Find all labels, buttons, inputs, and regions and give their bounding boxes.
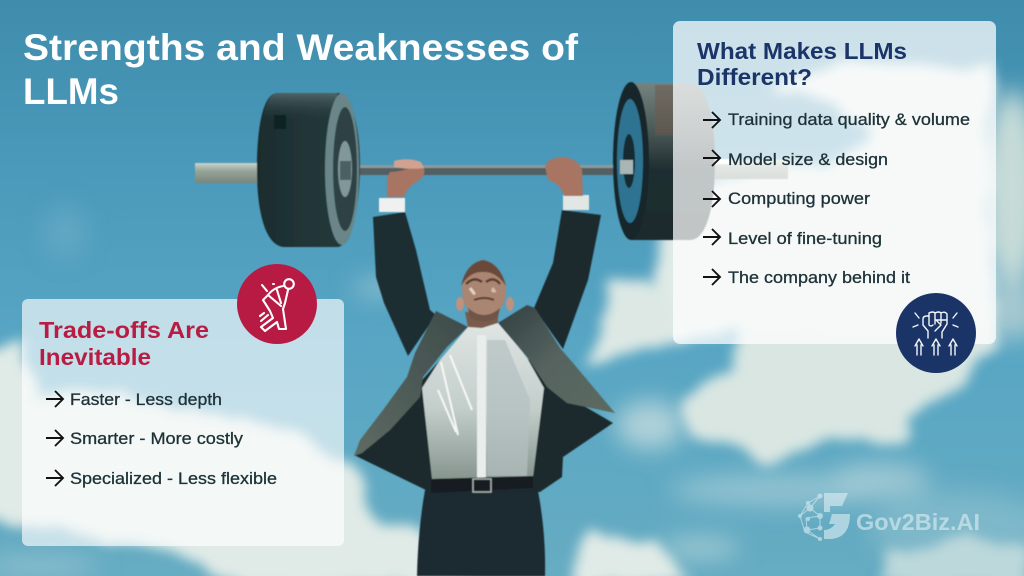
man: right sleeve xyxy=(534,210,601,349)
man: jacket inner lining xyxy=(354,360,613,492)
heading: Trade-offs Are Inevitable xyxy=(39,317,209,370)
heading: What Makes LLMs Different? xyxy=(697,38,907,90)
logo mark xyxy=(798,493,850,541)
list: LLM differentiators: Computing power xyxy=(728,189,870,208)
man: shirt xyxy=(422,322,544,479)
man: trousers xyxy=(417,486,545,576)
man: hands and cuffs xyxy=(379,157,589,212)
list: trade-offs: Specialized - Less flexible xyxy=(70,469,277,488)
man: head xyxy=(456,260,514,322)
heading: What Makes LLMs Different?: Different? xyxy=(697,64,812,90)
list: trade-offs: Smarter - More costly xyxy=(70,429,244,448)
icon: raised fist with up arrows xyxy=(896,293,976,373)
panel: What Makes LLMs Different? xyxy=(673,21,996,344)
heading: Trade-offs Are Inevitable: Trade-offs Are xyxy=(39,317,209,343)
photo: businessman lifting barbell xyxy=(195,82,788,576)
man: jacket left flap xyxy=(354,311,468,456)
title xyxy=(23,27,579,112)
title: LLMs xyxy=(23,71,119,112)
heading: What Makes LLMs Different?: What Makes LLMs xyxy=(697,38,907,64)
list: trade-offs xyxy=(46,390,277,488)
logo: Gov2Biz.AI xyxy=(798,493,980,541)
man: left sleeve xyxy=(373,212,436,356)
list: LLM differentiators xyxy=(703,110,970,287)
logo wordmark: Gov2Biz.AI xyxy=(856,509,980,535)
barbell xyxy=(195,82,788,247)
list: LLM differentiators: Level of fine-tuning xyxy=(728,229,882,248)
icon: person straining under weight xyxy=(237,264,317,344)
heading: Trade-offs Are Inevitable: Inevitable xyxy=(39,344,151,370)
list: LLM differentiators: Model size & design xyxy=(728,150,888,169)
man: jacket right flap xyxy=(498,305,615,413)
man: neck xyxy=(465,312,498,328)
list: LLM differentiators: Training data quality & volume xyxy=(728,110,970,129)
list: LLM differentiators: The company behind it xyxy=(728,268,910,287)
title: Strengths and Weaknesses of xyxy=(23,27,579,68)
list: trade-offs: Faster - Less depth xyxy=(70,390,222,409)
panel: Trade-offs Are Inevitable xyxy=(22,299,344,546)
man: belt and buckle xyxy=(431,476,533,493)
